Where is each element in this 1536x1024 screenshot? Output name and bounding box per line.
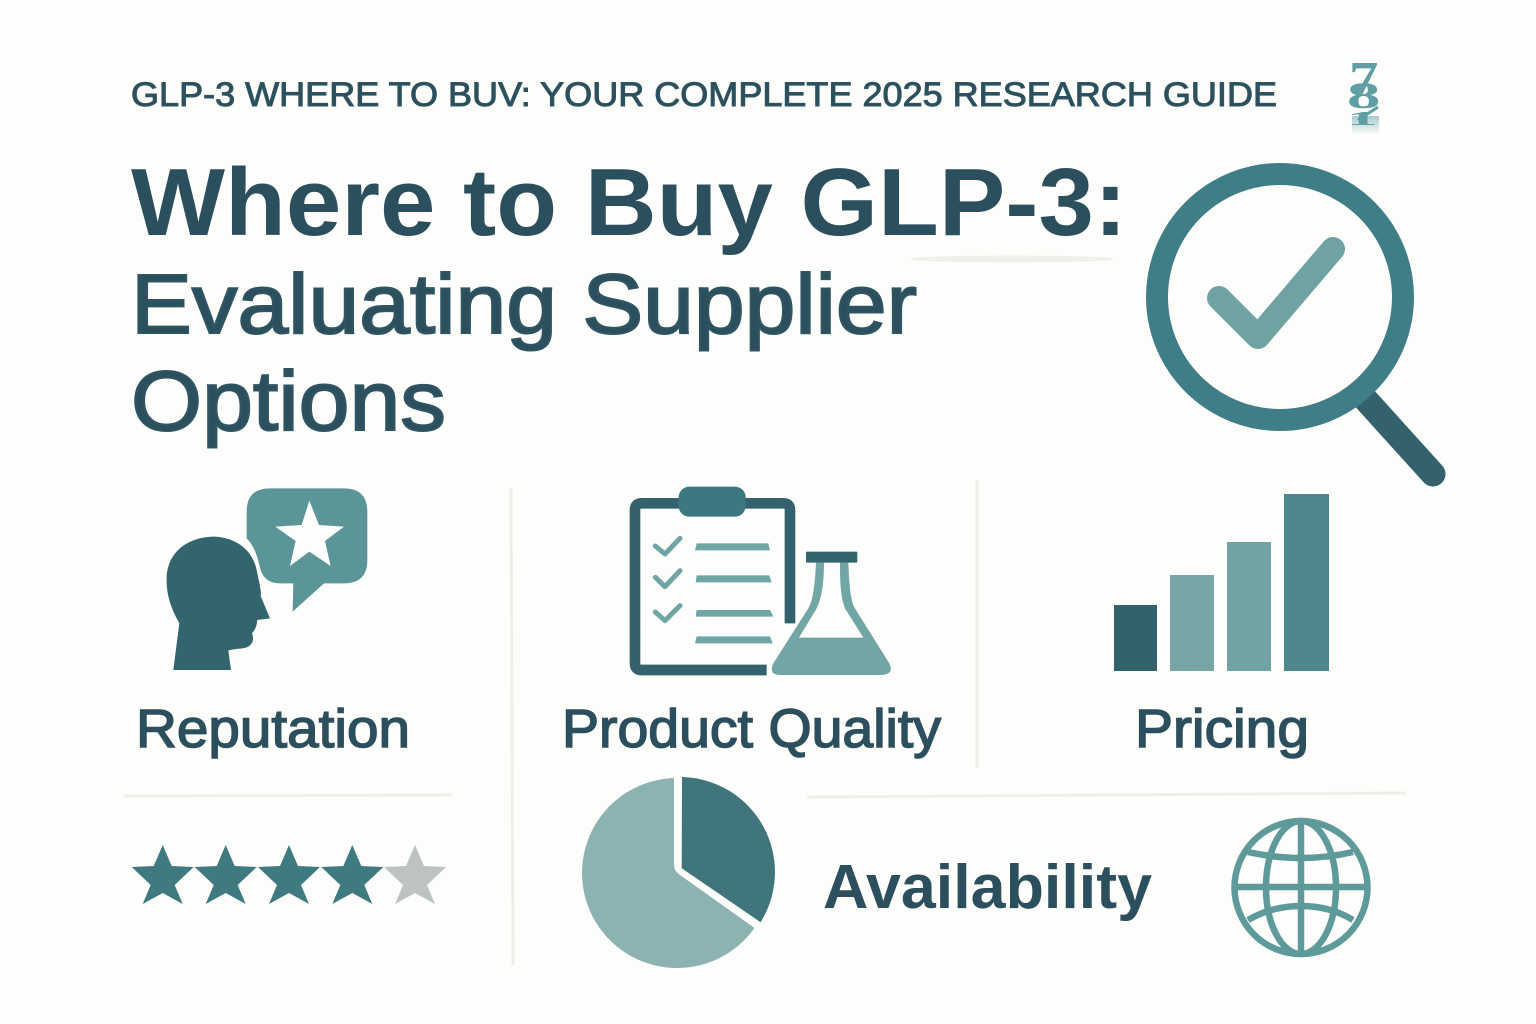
main title: Where to Buy GLP-3:: [131, 149, 1127, 256]
label: product quality: Product Quality: [562, 699, 941, 759]
rating stars: [132, 845, 446, 904]
pie chart: [582, 777, 775, 968]
header line: GLP-3 WHERE TO BUV: YOUR COMPLETE 2025 RESEARCH GUIDE: [131, 76, 1277, 114]
icon: stacked numeral mark: [1347, 52, 1380, 135]
label: reputation: Reputation: [136, 699, 410, 759]
icon: head with star speech bubble: [167, 488, 367, 670]
icon: stacked numeral mark: 8: [1347, 75, 1380, 116]
label: availability: Availability: [823, 853, 1153, 922]
icon: bar chart: [1114, 494, 1329, 671]
icon: stacked numeral mark: 1: [1347, 107, 1378, 129]
label: pricing: Pricing: [1135, 699, 1309, 759]
title underline smudge: [910, 256, 1114, 262]
icon: stacked numeral mark: 7: [1349, 52, 1378, 106]
icon: globe: [1234, 821, 1368, 954]
subtitle line one: Evaluating Supplier: [131, 257, 917, 351]
subtitle line two: Options: [131, 354, 446, 448]
icon: magnifier with check: [1157, 174, 1433, 474]
icon: clipboard and flask: [635, 487, 891, 675]
